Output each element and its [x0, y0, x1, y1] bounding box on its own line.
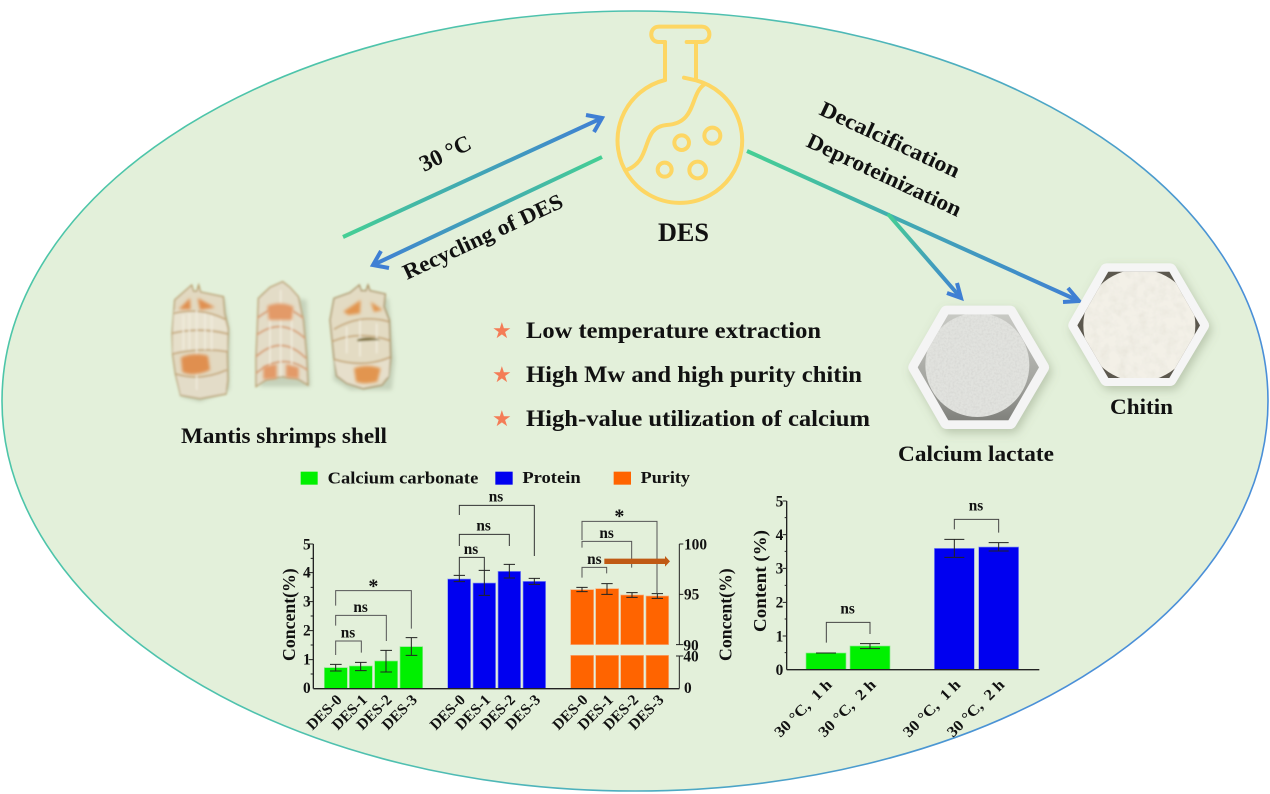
axis numbers: 5	[776, 494, 784, 511]
chart: 30 C time comparison	[750, 494, 1039, 741]
category labels: 30 °C, 1 h	[771, 676, 836, 741]
significance labels: ns	[840, 600, 855, 617]
category labels	[771, 676, 1009, 741]
significance labels: ns	[353, 599, 368, 616]
photo: chitin hexagon	[1075, 269, 1202, 381]
right axis numbers	[683, 536, 707, 697]
significance labels: ns	[341, 624, 355, 641]
axis numbers: 3	[776, 561, 784, 578]
green bars: calcium carbonate	[324, 647, 423, 688]
category labels: 30 °C, 1 h	[900, 676, 965, 741]
significance labels: ns	[969, 498, 983, 515]
shell 3	[330, 285, 395, 390]
axis numbers: 1	[776, 629, 783, 646]
right axis numbers: 40	[683, 648, 699, 665]
left axis numbers: 1	[303, 651, 311, 668]
icon: DES flask	[618, 27, 742, 203]
label: Decalcification: Decalcification	[816, 96, 964, 183]
category labels: 30 °C, 2 h	[944, 676, 1009, 741]
label: DES: DES	[658, 218, 709, 247]
significance labels	[840, 498, 983, 617]
error bars	[330, 564, 663, 672]
category labels: DES-0	[549, 691, 592, 734]
significance labels: *	[614, 506, 624, 528]
legend	[301, 468, 691, 488]
left axis numbers: 4	[303, 565, 311, 582]
right axis numbers: 95	[684, 587, 700, 604]
legend: Protein	[522, 468, 581, 487]
category labels: 30 °C, 2 h	[815, 676, 880, 741]
axis numbers	[776, 494, 784, 679]
label: Mantis shrimps shell: Mantis shrimps shell	[181, 423, 387, 448]
axes	[783, 501, 1039, 670]
blue bars	[934, 547, 1019, 669]
label: Chitin: Chitin	[1110, 394, 1173, 419]
category labels	[303, 691, 668, 734]
axis title: Content (%)	[750, 530, 771, 632]
blue bars: protein	[448, 571, 546, 688]
shell 1	[172, 285, 230, 402]
highlight 3: High-value utilization of calcium	[526, 406, 870, 431]
category labels: DES-0	[303, 691, 346, 734]
brackets	[826, 519, 999, 643]
right axis title: Concent(%)	[715, 568, 735, 661]
right axis numbers: 0	[684, 680, 692, 697]
right axis numbers: 90	[683, 638, 699, 655]
arrow: DES to chitin	[747, 151, 1079, 302]
label: Recycling of DES: Recycling of DES	[399, 188, 567, 285]
photo: mantis shrimp shells	[172, 282, 395, 402]
category labels: DES-3	[502, 691, 544, 734]
left axis title: Concent(%)	[279, 568, 299, 661]
axis numbers: 0	[776, 662, 784, 679]
error bars	[816, 539, 1009, 653]
axis numbers: 4	[776, 527, 784, 544]
significance brackets	[336, 505, 657, 655]
significance labels	[341, 488, 624, 641]
shell 2	[256, 282, 311, 387]
label: Calcium lactate: Calcium lactate	[898, 441, 1054, 466]
significance labels: *	[368, 576, 378, 598]
label: 30 C: 30 °C	[415, 130, 475, 176]
chart: DES comparison bars	[279, 468, 735, 734]
left axis numbers: 0	[303, 680, 311, 697]
axes	[309, 544, 683, 689]
arrow: recycling of DES	[373, 157, 602, 268]
highlight 2: High Mw and high purity chitin	[526, 362, 862, 387]
highlight 1: ★	[492, 319, 512, 344]
highlight 2: ★	[492, 363, 512, 388]
category labels: DES-2	[353, 691, 395, 734]
category labels: DES-1	[329, 691, 371, 734]
category labels: DES-1	[575, 691, 617, 734]
legend: Calcium carbonate	[328, 469, 478, 488]
significance labels: ns	[464, 541, 478, 558]
green bars	[806, 646, 890, 669]
orange bars: purity	[571, 589, 669, 688]
left axis numbers	[303, 536, 311, 697]
left axis numbers: 5	[303, 536, 311, 553]
category labels: DES-2	[477, 691, 519, 734]
significance labels: ns	[476, 518, 491, 535]
highlight 3: ★	[492, 407, 512, 432]
right axis numbers: 100	[684, 536, 707, 553]
left axis numbers: 3	[303, 593, 311, 610]
significance labels: ns	[587, 551, 602, 568]
significance labels: ns	[489, 488, 503, 505]
significance labels: ns	[599, 525, 614, 542]
category labels: DES-1	[452, 691, 494, 734]
label: Deproteinization: Deproteinization	[803, 128, 966, 222]
left axis numbers: 2	[303, 622, 311, 639]
category labels: DES-2	[600, 691, 642, 734]
arrow: shell to DES at 30 C	[343, 115, 602, 237]
category labels: DES-3	[625, 691, 668, 734]
photo: calcium lactate hexagon	[915, 312, 1042, 422]
arrow: purity right axis	[604, 556, 670, 567]
highlight 1: Low temperature extraction	[526, 318, 821, 343]
axis numbers: 2	[776, 595, 783, 612]
legend: Purity	[641, 468, 691, 487]
highlights list	[492, 318, 870, 432]
category labels: DES-3	[379, 691, 421, 734]
category labels: DES-0	[427, 691, 469, 734]
arrow: branch to calcium lactate	[888, 214, 961, 298]
